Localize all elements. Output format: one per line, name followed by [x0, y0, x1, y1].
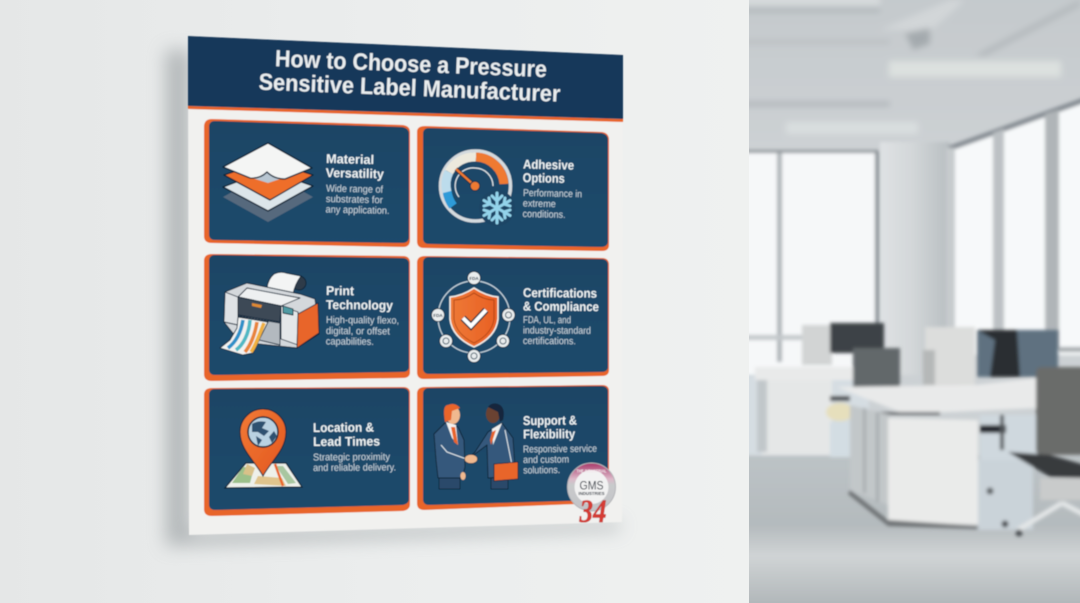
description: capabilities. [326, 336, 374, 348]
description: FDA, UL, and [523, 315, 571, 326]
heading: Location & [313, 420, 374, 435]
icon: map pin on map [225, 409, 302, 488]
heading: Certifications [523, 285, 597, 301]
heading: Print [326, 283, 355, 298]
office furniture [745, 323, 1080, 536]
heading: Options [523, 170, 565, 186]
panel: material versatility [204, 119, 410, 247]
badge: GMS Industries 34 years: 34 [579, 494, 606, 530]
panel: location and lead times [204, 387, 410, 516]
description: conditions. [522, 209, 566, 221]
poster [188, 36, 623, 535]
icon: shield with certification ring: FDA [469, 276, 479, 281]
icon: stacked material layers [223, 143, 313, 222]
icon: shield with certification ring [432, 272, 515, 362]
description: Strategic proximity [313, 452, 390, 463]
description: Performance in [523, 188, 582, 200]
person right [464, 403, 515, 489]
description [523, 444, 598, 476]
heading [313, 420, 380, 449]
description: industry-standard [523, 325, 591, 337]
paper roll [292, 276, 306, 290]
header banner [188, 36, 623, 122]
heading: Technology [326, 297, 394, 313]
printer body [224, 283, 319, 348]
column [880, 142, 950, 375]
ceiling [749, 0, 1080, 133]
icon: shield with certification ring: FDA [433, 313, 443, 318]
poster board [188, 36, 623, 535]
heading: Adhesive [523, 157, 574, 173]
badge: GMS Industries 34 years: GMS [580, 478, 604, 492]
heading [523, 157, 574, 186]
icon: two people shaking hands [434, 403, 518, 489]
description: certifications. [523, 336, 576, 347]
heading [326, 283, 394, 313]
folder [494, 462, 518, 481]
description: Responsive service [523, 444, 597, 455]
description: any application. [325, 204, 390, 217]
floor [740, 455, 1080, 603]
panel: certifications and compliance [417, 256, 609, 379]
description: substrates for [326, 194, 384, 206]
poster shadow [166, 50, 620, 546]
description [522, 188, 582, 221]
panel: print technology [204, 254, 410, 381]
heading: Versatility [326, 165, 385, 181]
icon: wide format printer [220, 272, 319, 355]
heading: & Compliance [523, 298, 599, 314]
badge: GMS Industries 34 years: THE INDUSTRIAL [576, 468, 607, 474]
title: How to Choose a Pressure [275, 45, 547, 82]
blurred office photo [740, 0, 1080, 603]
description: extreme [523, 198, 556, 210]
printed sheet [220, 317, 268, 355]
description [325, 184, 390, 217]
badge: GMS Industries 34 years [568, 463, 616, 530]
description: Wide range of [326, 184, 383, 196]
heading [523, 413, 577, 441]
right windows [946, 95, 1080, 355]
heading [523, 285, 599, 314]
person left [434, 404, 469, 489]
description [523, 315, 591, 347]
heading: Support & [523, 413, 577, 428]
heading: Material [326, 151, 374, 167]
description [313, 452, 396, 474]
description: digital, or offset [326, 326, 390, 338]
left window [745, 150, 880, 377]
description: and reliable delivery. [313, 462, 396, 474]
panel: support and flexibility [417, 385, 609, 510]
heading: Lead Times [313, 434, 380, 449]
panel: adhesive options [417, 126, 609, 251]
description: and custom [523, 455, 569, 466]
description: High-quality flexo, [326, 315, 399, 327]
white wall background [0, 0, 749, 603]
heading [326, 151, 385, 181]
description [326, 315, 399, 348]
icon: gauge with snowflake [440, 151, 515, 226]
badge: GMS Industries 34 years: INDUSTRIES [578, 491, 604, 496]
title [258, 45, 562, 107]
heading: Flexibility [523, 426, 576, 441]
title: Sensitive Label Manufacturer [258, 69, 561, 107]
description: solutions. [523, 465, 560, 476]
